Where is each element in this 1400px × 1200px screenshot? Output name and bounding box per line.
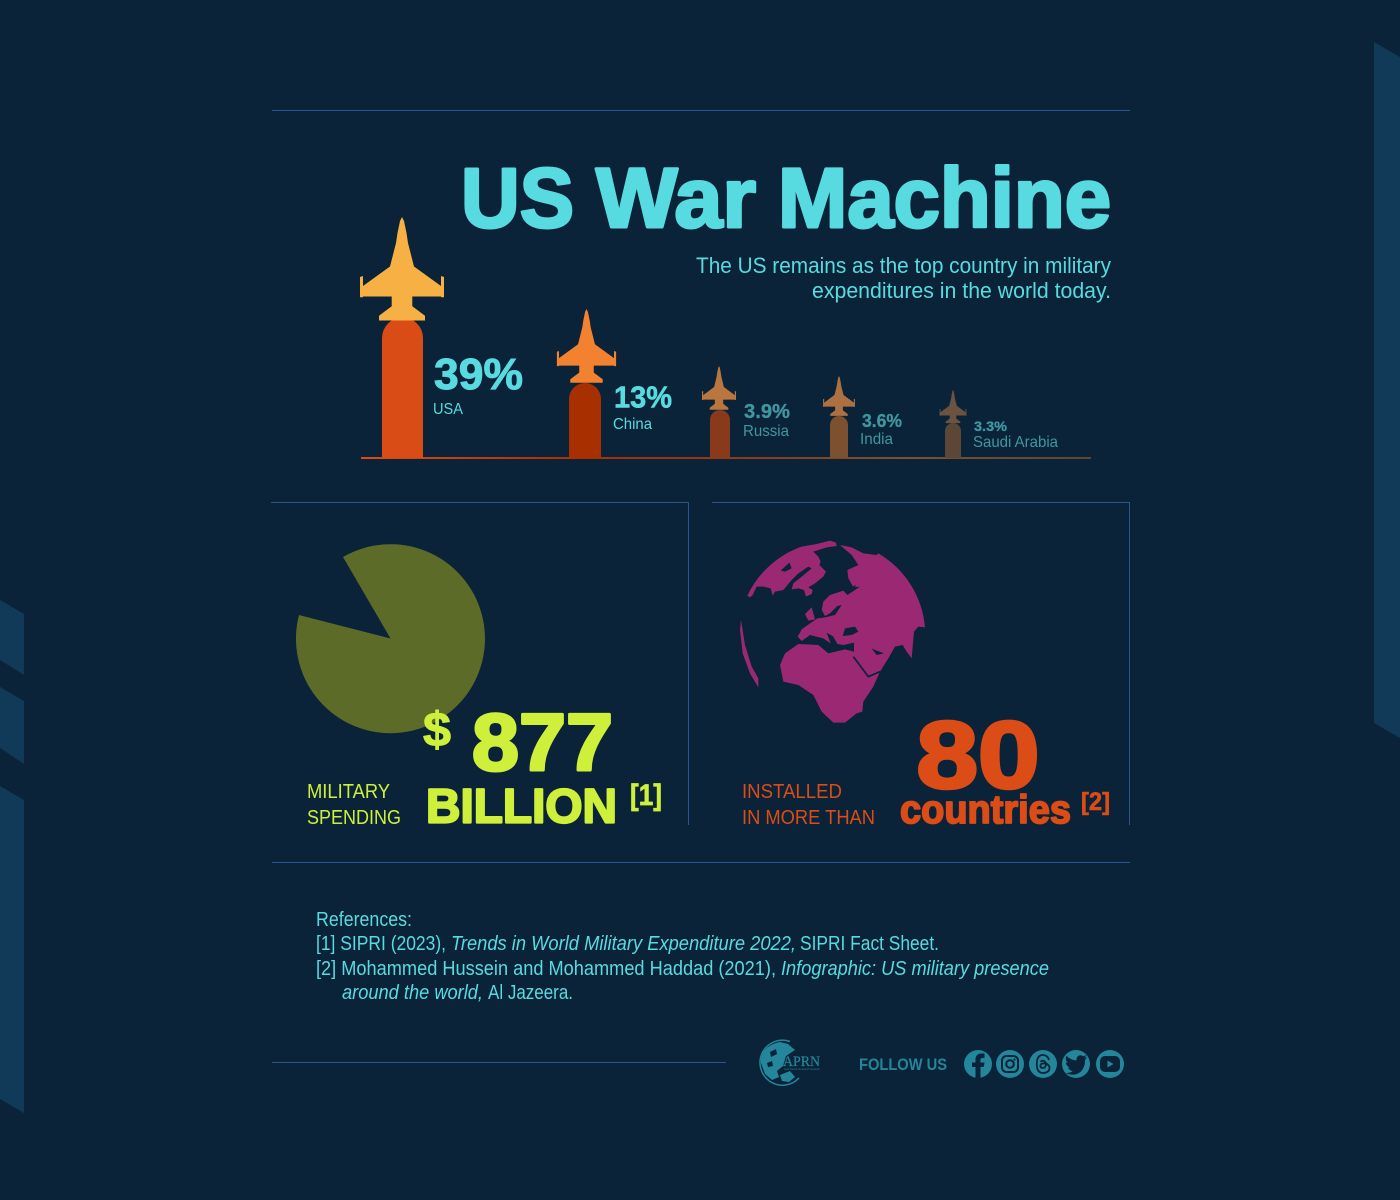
title: US <box>461 151 574 245</box>
subtitle <box>696 253 1111 303</box>
references: References: <box>316 909 412 931</box>
USA bar and jet: 39% <box>434 350 523 399</box>
icon: twitter <box>1062 1050 1090 1078</box>
title: Machine <box>778 151 1111 245</box>
presence label <box>742 781 875 829</box>
icon: facebook <box>964 1050 992 1078</box>
references <box>316 909 1049 1004</box>
Russia bar and jet: Russia <box>743 423 789 440</box>
references: Infographic: US military presence <box>781 958 1049 980</box>
India bar and jet: India <box>860 431 893 448</box>
China bar and jet: 13% <box>614 380 672 414</box>
logo: APRN <box>760 1040 820 1085</box>
spending figure: BILLION <box>426 780 617 834</box>
spending label: MILITARY <box>307 781 390 803</box>
references: [1] SIPRI (2023), <box>316 933 446 955</box>
title <box>461 151 1111 245</box>
Saudi Arabia bar and jet <box>940 390 1058 458</box>
references: Al Jazeera. <box>488 982 573 1004</box>
icon: instagram <box>996 1050 1024 1078</box>
references: Trends in World Military Expenditure 2022, <box>451 933 796 955</box>
spending label: SPENDING <box>307 807 401 829</box>
China bar and jet: China <box>613 416 652 433</box>
references: SIPRI Fact Sheet. <box>800 933 939 955</box>
India bar and jet <box>823 376 902 458</box>
social icons <box>964 1050 1124 1078</box>
Russia bar and jet: 3.9% <box>744 401 790 423</box>
Saudi Arabia bar and jet: 3.3% <box>974 418 1008 434</box>
icon: youtube <box>1096 1050 1124 1078</box>
presence label: INSTALLED <box>742 781 842 803</box>
subtitle: The US remains as the top country in military <box>696 253 1111 278</box>
presence figure: countries <box>900 788 1071 832</box>
presence label: IN MORE THAN <box>742 807 875 829</box>
Saudi Arabia bar and jet: Saudi Arabia <box>973 434 1058 451</box>
Russia bar and jet <box>702 366 790 458</box>
bar chart: military expenditure share by country <box>360 217 1091 459</box>
spending figure <box>423 698 662 834</box>
references: around the world, <box>342 982 483 1004</box>
follow us label: FOLLOW US <box>859 1055 947 1074</box>
references: [2] Mohammed Hussein and Mohammed Haddad (2021), <box>316 958 776 980</box>
India bar and jet: 3.6% <box>862 411 902 431</box>
title: War <box>596 151 756 245</box>
pie chart <box>296 544 485 733</box>
spending label <box>307 781 401 829</box>
panel: military spending <box>296 544 662 834</box>
USA bar and jet <box>360 217 523 458</box>
USA bar and jet: USA <box>433 401 463 418</box>
spending figure: [1] <box>630 779 662 812</box>
spending figure: 877 <box>472 698 613 788</box>
presence figure: [2] <box>1081 788 1110 816</box>
panel: overseas presence <box>740 541 1110 832</box>
logo: APRN: Asia Pacific Research Network <box>784 1067 820 1071</box>
presence figure: 80 <box>916 702 1040 808</box>
presence figure <box>900 702 1110 832</box>
spending figure: $ <box>423 704 451 757</box>
subtitle: expenditures in the world today. <box>812 278 1111 303</box>
logo: APRN: APRN <box>783 1054 820 1070</box>
China bar and jet <box>557 309 672 458</box>
icon: globe <box>740 541 925 723</box>
icon: threads <box>1029 1050 1057 1078</box>
